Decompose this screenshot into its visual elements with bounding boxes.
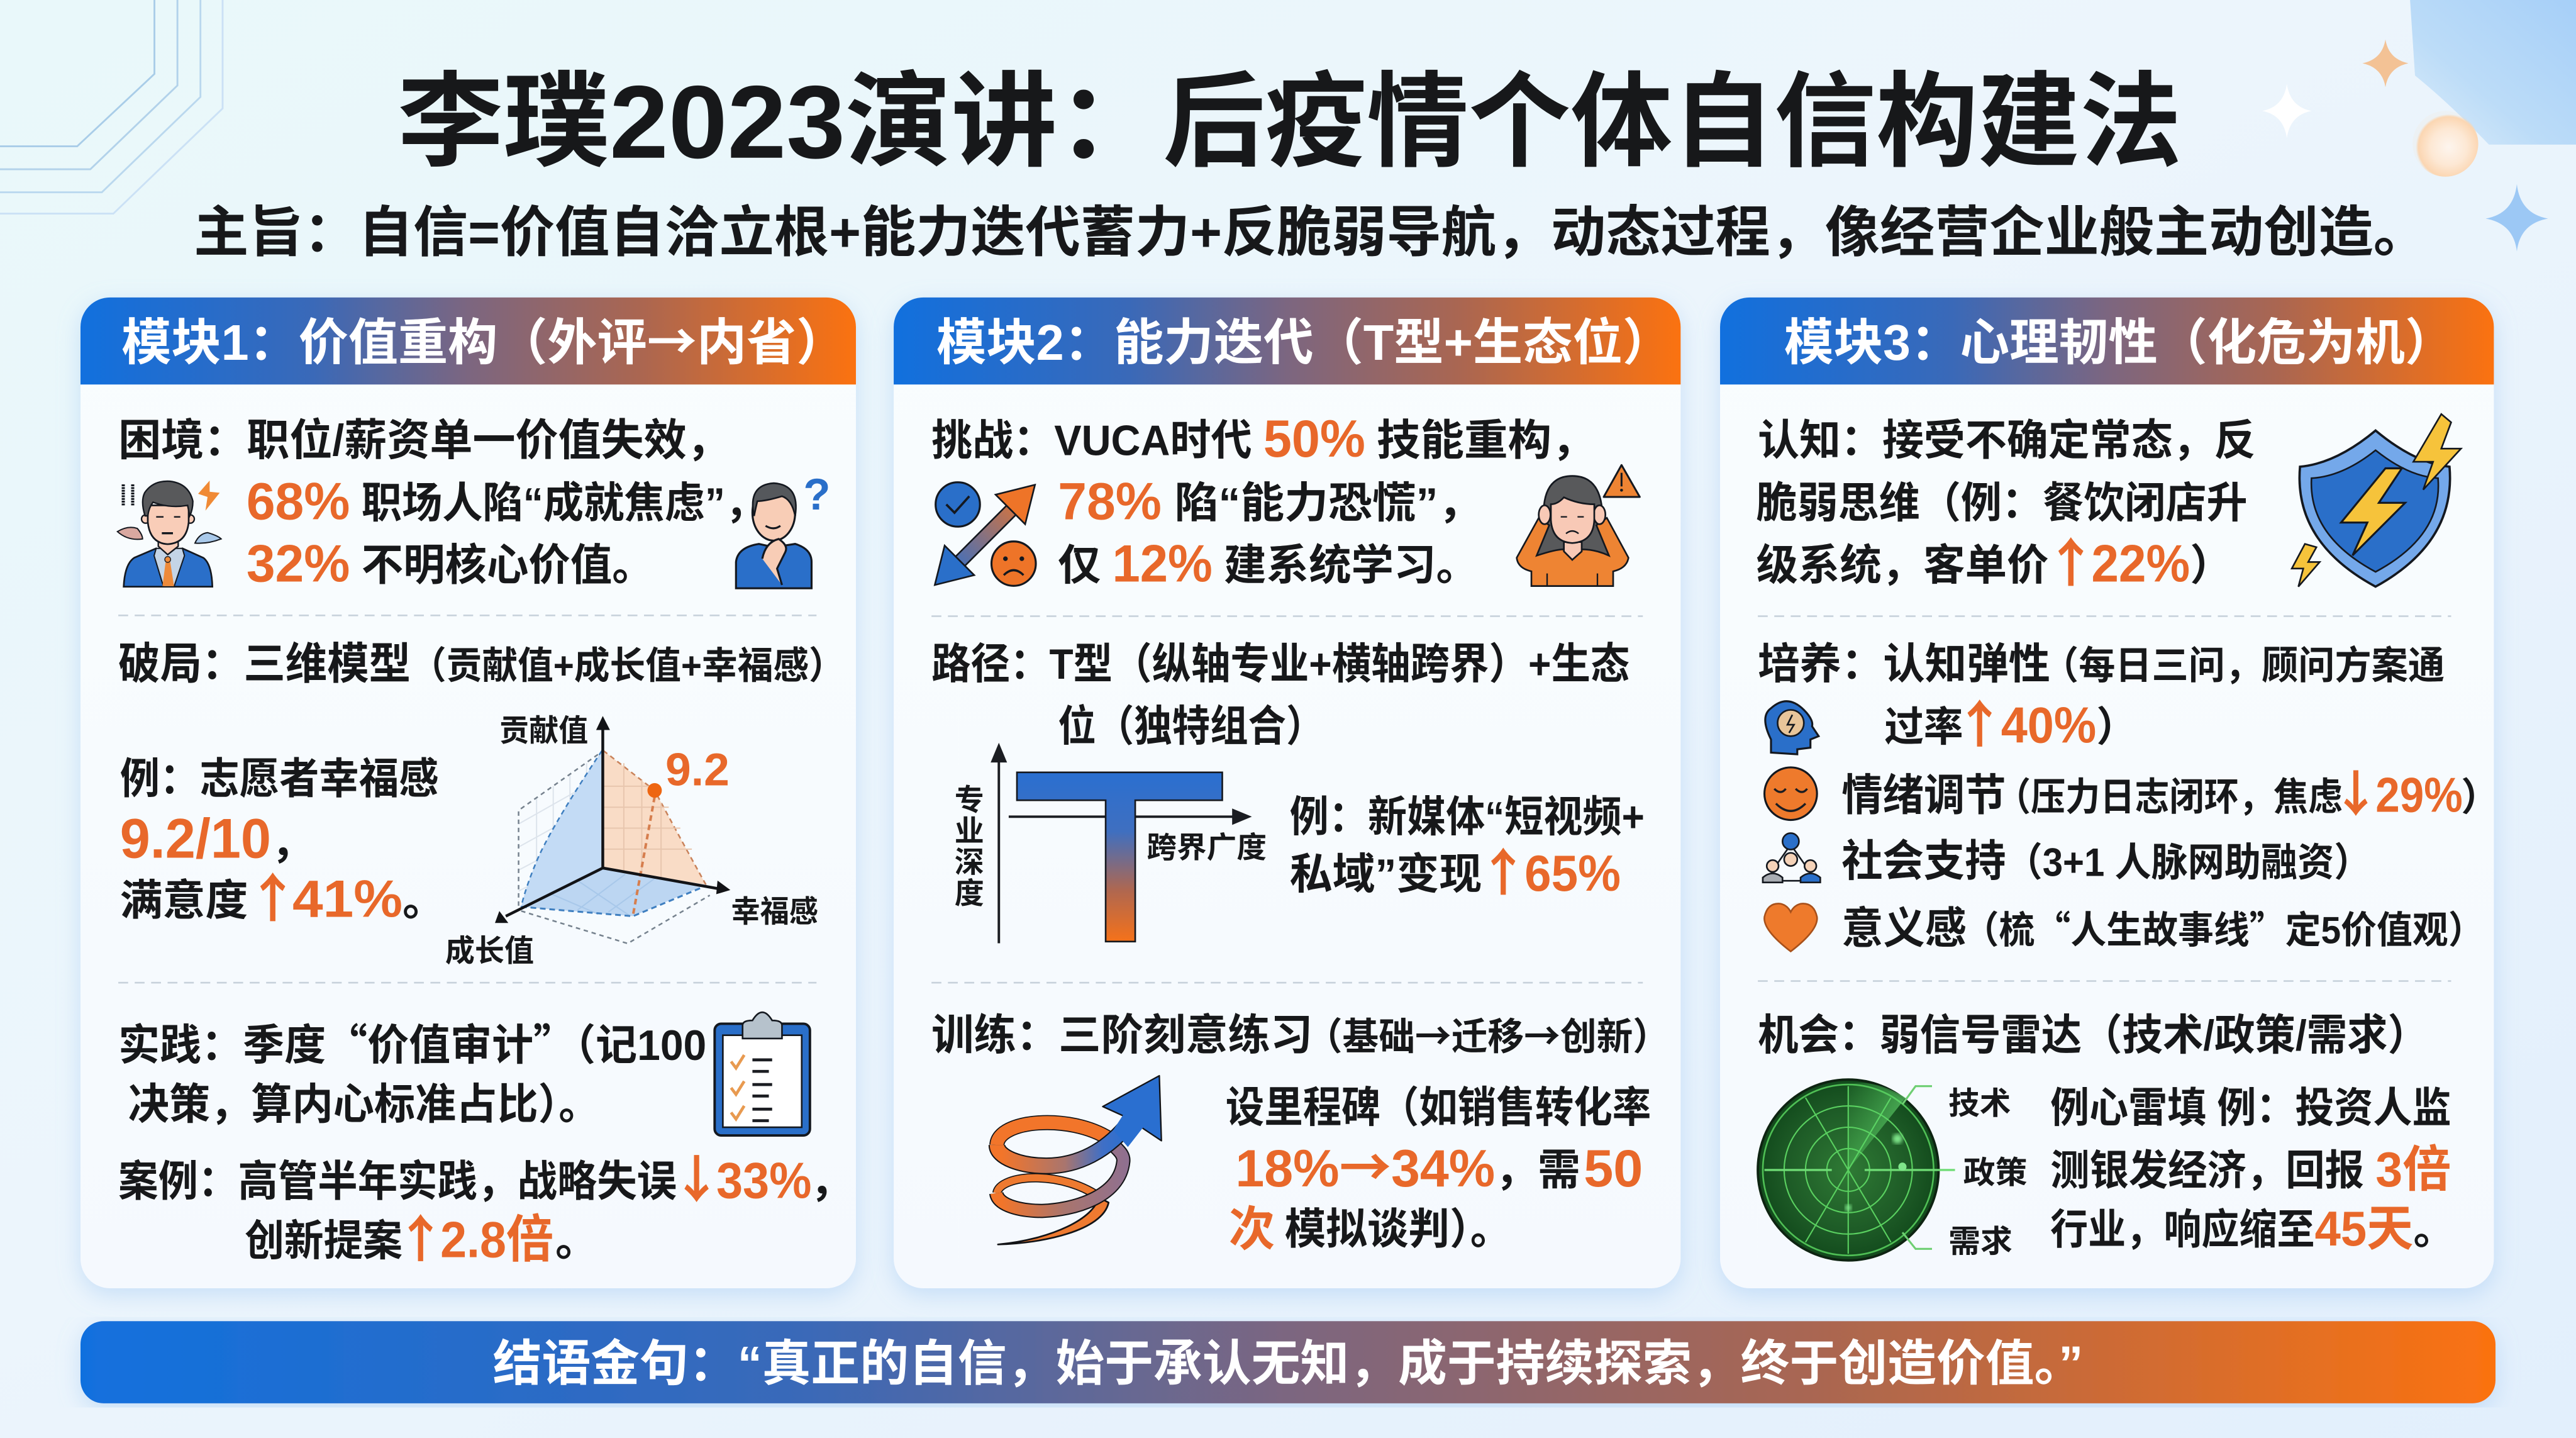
text: cultivate: 过率 — [1884, 704, 1963, 750]
corner decoration: blue gradient block — [2410, 0, 2576, 145]
module 3 header — [1720, 298, 2494, 384]
text: investor example: 行业，响应缩至 — [2050, 1207, 2315, 1253]
text: emotion regulation: ↓ — [2331, 754, 2380, 826]
text: training — [931, 1006, 1669, 1061]
divider — [931, 616, 1643, 617]
text: cultivate: ↑ — [1954, 684, 2005, 758]
icon: spiral arrow — [996, 1076, 1162, 1244]
text: social support: 社会支持 — [1841, 836, 2006, 885]
icon: anxious businessman — [118, 481, 221, 587]
text: dilemma: 68% — [247, 471, 350, 530]
closing quote bar: 结语金句：“真正的自信，始于承认无知，成于持续探索，终于创造价值。” — [493, 1335, 2083, 1391]
text: new media example: 例：新媒体“短视频+ — [1290, 794, 1645, 841]
divider — [1758, 981, 2451, 982]
divider — [118, 982, 816, 983]
axis labels: 跨界广度 — [1146, 831, 1267, 864]
panel: module 2 — [894, 298, 1680, 1288]
text: investor example: 3倍 — [2375, 1142, 2451, 1197]
text: cognition: 级系统，客单价 — [1756, 542, 2048, 589]
text: case: ↓ — [671, 1139, 722, 1213]
text: investor example — [2050, 1085, 2455, 1256]
text: cultivate: 40% — [2001, 698, 2096, 754]
text: cultivate: ） — [2096, 704, 2138, 750]
text: emotion regulation: （压力日志闭环，焦虑 — [1996, 776, 2343, 819]
text: milestones: 模拟谈判）。 — [1285, 1206, 1511, 1253]
text: opportunity: 机会：弱信号雷达（技术/政策/需求） — [1758, 1012, 2428, 1059]
text: milestones: 18%→34% — [1235, 1126, 1495, 1202]
chart: radar — [1758, 1079, 2028, 1261]
icon: heart — [1764, 903, 1817, 952]
icon: up and down arrows with faces — [935, 482, 1036, 586]
radar labels: 需求 — [1948, 1224, 2012, 1259]
text: challenge: 陷“能力恐慌”， — [1175, 480, 1482, 527]
text: path — [931, 641, 1629, 750]
text: volunteer example: 例：志愿者幸福感 — [120, 756, 438, 803]
text: volunteer example — [120, 756, 445, 933]
text: milestones: ，需 — [1495, 1147, 1580, 1194]
text: new media example: 65% — [1524, 845, 1621, 902]
text: training: （基础→迁移→创新） — [1306, 1006, 1669, 1061]
text: case: ， — [810, 1159, 853, 1206]
icon: thinking person: ? — [803, 469, 830, 519]
radar labels: 政策 — [1963, 1155, 2028, 1190]
divider — [931, 982, 1643, 983]
text: sense of meaning: （梳“人生故事线”定5价值观） — [1963, 900, 2484, 954]
text: training: 训练：三阶刻意练习 — [931, 1012, 1313, 1059]
text: milestones — [1226, 1084, 1651, 1256]
radar labels — [1948, 1086, 2028, 1259]
text: breakthrough model: 破局：三维模型 — [118, 639, 411, 688]
text: volunteer example: ， — [271, 820, 314, 867]
text: path: 路径：T型（纵轴专业+横轴跨界）+生态 — [931, 641, 1629, 688]
axis labels: 专 — [955, 783, 984, 817]
text: emotion regulation — [1841, 754, 2500, 826]
text: volunteer example: ↑ — [247, 857, 299, 933]
text: cognition — [1756, 418, 2256, 598]
text: challenge: 12% — [1112, 534, 1213, 593]
text: dilemma: 32% — [247, 534, 350, 593]
icon: smiling face — [1765, 767, 1817, 820]
text: case: ↑ — [395, 1198, 446, 1272]
icon: stressed woman — [1517, 465, 1640, 586]
text: case: 33% — [716, 1152, 811, 1209]
divider — [1758, 616, 2451, 617]
chart labels: 幸福感 — [731, 895, 818, 928]
icon: peach glow circle — [2412, 111, 2479, 177]
axis labels: 业 — [955, 814, 984, 847]
axis labels: 度 — [955, 877, 984, 910]
icon: head with brain — [1765, 701, 1819, 754]
icon: shield with lightning — [2292, 414, 2461, 587]
text: dilemma: 困境：职位/薪资单一价值失效， — [118, 416, 730, 465]
subtitle: 主旨：自信=价值自洽立根+能力迭代蓄力+反脆弱导航，动态过程，像经营企业般主动创造。 — [194, 202, 2428, 264]
text: volunteer example: 。 — [402, 878, 445, 925]
radar labels: 技术 — [1948, 1086, 2011, 1121]
text: cognition: 认知：接受不确定常态，反 — [1758, 418, 2256, 465]
decoration: circuit lines top left — [0, 0, 223, 214]
text: path: 位（独特组合） — [1058, 703, 1324, 750]
icon: thinking person — [736, 469, 830, 588]
closing quote bar — [80, 1321, 2496, 1403]
text: case: 2.8倍 — [440, 1212, 553, 1268]
text: cultivate: 培养：认知弹性 — [1758, 641, 2050, 688]
title: 后疫情个体自信构建法 — [1163, 64, 2182, 180]
icon: orange sparkle — [2362, 40, 2409, 87]
axis labels: 深 — [955, 845, 984, 879]
text: volunteer example: 41% — [292, 869, 402, 928]
chart labels: 9.2 — [665, 745, 730, 796]
chart labels: 成长值 — [445, 934, 534, 968]
chart: three-axis value model — [445, 714, 818, 968]
chart: T-shaped model — [955, 743, 1267, 943]
text: cultivate: （每日三问，顾问方案通 — [2042, 644, 2445, 688]
text: milestones: 50 — [1584, 1139, 1643, 1198]
module 2 header: 模块2：能力迭代（T型+生态位） — [936, 315, 1672, 371]
text: emotion regulation: ） — [2461, 776, 2500, 819]
text: cognition: ） — [2190, 542, 2233, 589]
text: breakthrough model: （贡献值+成长值+幸福感） — [411, 645, 845, 687]
text: challenge: 78% — [1058, 471, 1162, 530]
text: challenge: 仅 — [1058, 542, 1101, 589]
text: dilemma: 职场人陷“成就焦虑”， — [362, 480, 765, 527]
icon: social network people — [1763, 833, 1820, 883]
panel: module 1 — [80, 298, 856, 1288]
text: case — [118, 1139, 853, 1272]
module 3 header: 模块3：心理韧性（化危为机） — [1784, 315, 2455, 371]
text: investor example: 测银发经济，回报 — [2050, 1147, 2364, 1194]
text: case: 案例：高管半年实践，战略失误 — [118, 1159, 677, 1206]
text: cognition: 22% — [2091, 534, 2190, 593]
text: emotion regulation: 29% — [2375, 767, 2463, 822]
text: challenge: 建系统学习。 — [1224, 542, 1479, 589]
text: case: 。 — [555, 1218, 598, 1265]
text: cognition: 脆弱思维（例：餐饮闭店升 — [1756, 480, 2248, 527]
chart labels — [445, 714, 818, 968]
text: practice — [118, 1010, 706, 1129]
text: volunteer example: 9.2/10 — [120, 808, 271, 870]
text: case: 创新提案 — [245, 1218, 402, 1265]
text: cognition: ↑ — [2045, 521, 2097, 598]
text: emotion regulation: 情绪调节 — [1841, 771, 2006, 820]
panel: module 3 — [1720, 298, 2500, 1288]
module 1 header: 模块1：价值重构（外评→内省） — [121, 302, 846, 374]
text: new media example: ↑ — [1478, 832, 1529, 906]
text: challenge: 挑战：VUCA时代 — [931, 418, 1252, 465]
divider — [118, 615, 816, 616]
text: practice: 决策，算内心标准占比）。 — [128, 1081, 599, 1129]
text: social support: （3+1 人脉网助融资） — [2006, 840, 2370, 884]
text: new media example — [1290, 794, 1645, 906]
axis labels — [955, 783, 1267, 910]
text: practice: 实践：季度“价值审计”（记100 — [118, 1010, 706, 1073]
text: challenge — [931, 409, 1595, 593]
title: 李璞2023演讲： — [397, 64, 1163, 180]
text: milestones: 设里程碑（如销售转化率 — [1226, 1084, 1651, 1132]
text: volunteer example: 满意度 — [120, 878, 248, 925]
icon: blue sparkle — [2485, 184, 2548, 252]
text: social support — [1841, 836, 2370, 885]
text: breakthrough model — [118, 639, 845, 688]
text: cultivate — [1758, 641, 2445, 758]
text: new media example: 私域”变现 — [1290, 851, 1482, 898]
module 2 header — [894, 298, 1680, 384]
text: milestones: 次 — [1229, 1203, 1275, 1256]
text: sense of meaning: 意义感 — [1841, 903, 1967, 952]
chart labels: 贡献值 — [499, 714, 588, 748]
text: challenge: 技能重构， — [1377, 418, 1595, 465]
title — [397, 64, 2182, 180]
text: dilemma — [118, 416, 765, 593]
text: dilemma: 不明核心价值。 — [362, 540, 654, 589]
text: challenge: 50% — [1263, 409, 1365, 468]
text: investor example: 例心雷填 例：投资人监 — [2050, 1085, 2451, 1132]
text: investor example: 。 — [2413, 1207, 2455, 1253]
icon: white sparkle — [2262, 84, 2311, 138]
text: investor example: 45天 — [2315, 1201, 2413, 1256]
icon: clipboard checklist — [714, 1012, 810, 1135]
